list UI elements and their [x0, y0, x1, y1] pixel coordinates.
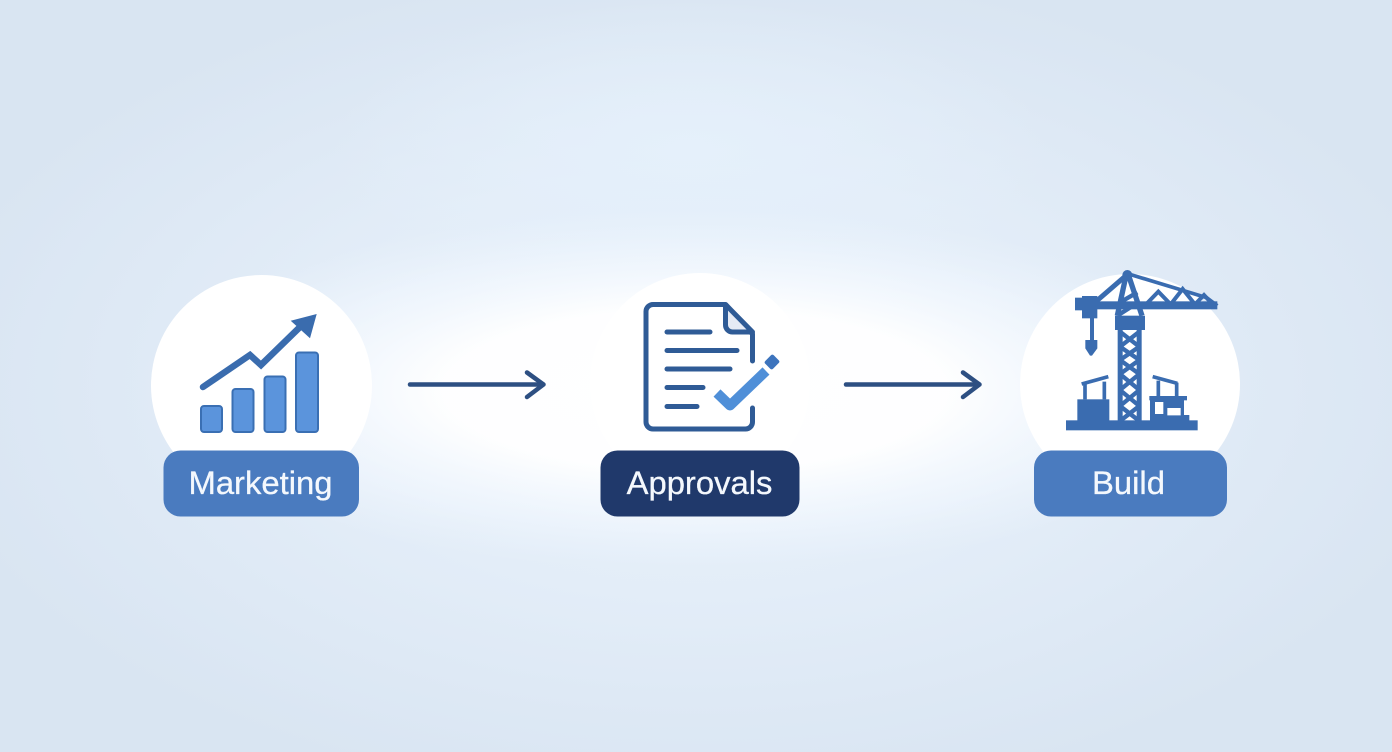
label: Build [1034, 450, 1227, 516]
circle: Approvals backdrop [590, 273, 810, 493]
circle: Build backdrop [1020, 274, 1240, 494]
label: Approvals [600, 450, 800, 516]
step: Build [1020, 270, 1240, 516]
arrow: Approvals to Build [846, 372, 980, 397]
label: Marketing: Marketing [188, 464, 332, 501]
label: Build: Build [1092, 464, 1165, 501]
step: Marketing [151, 275, 372, 516]
label: Approvals: Approvals [627, 464, 772, 501]
icon: rising bar chart [201, 314, 318, 432]
step: Approvals [590, 273, 810, 516]
label: Marketing [164, 450, 359, 516]
circle: Marketing backdrop [151, 275, 372, 496]
icon: document with checkmark [646, 304, 780, 429]
icon: tower crane and buildings [1066, 270, 1217, 430]
arrow: Marketing to Approvals [410, 372, 544, 397]
